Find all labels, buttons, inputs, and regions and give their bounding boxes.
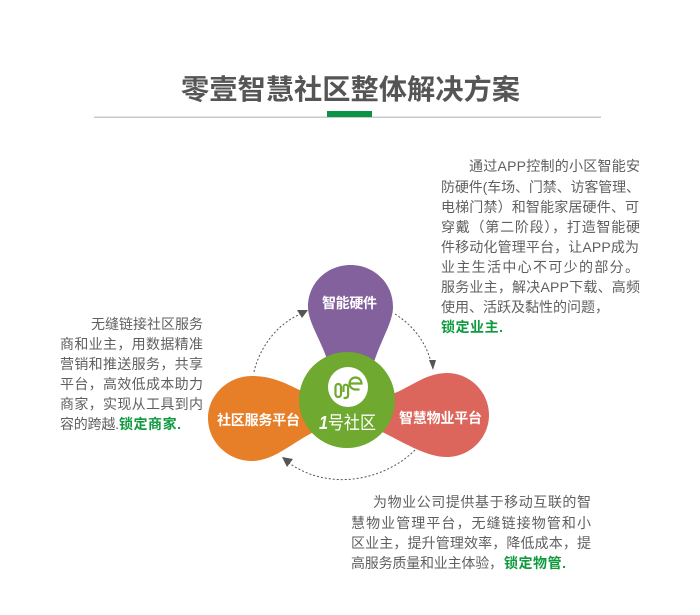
text block: smart property: 区业主，提升管理效率，降低成本，提: [351, 535, 591, 551]
text block: smart property: [351, 494, 591, 571]
text block: community services: 商和业主，用数据精准: [60, 336, 203, 352]
arrow: community services to hardware: [254, 310, 308, 372]
text block: smart property: 高服务质量和业主体验，: [351, 555, 503, 571]
center badge: 1号社区: [299, 352, 395, 448]
petal: smart hardware: [308, 265, 393, 362]
text block: smart hardware: 电梯门禁）和智能家居硬件、可: [441, 199, 639, 215]
arrow: hardware to property: [395, 314, 436, 370]
text block: community services: 平台，高效低成本助力: [60, 376, 203, 392]
badge name: 1号社区: [319, 413, 376, 433]
text block: smart property: 锁定物管.: [504, 555, 566, 571]
petal labels: 智慧物业平台: [399, 410, 482, 426]
text block: smart hardware: [441, 158, 640, 335]
text block: smart hardware: 件移动化管理平台，让APP成为: [441, 239, 639, 255]
petal labels: 智能硬件: [322, 295, 377, 311]
arrow: property to community services: [282, 450, 415, 480]
text block: smart property: 为物业公司提供基于移动互联的智: [373, 494, 591, 510]
text block: community services: 无缝链接社区服务: [91, 316, 203, 332]
text block: community services: 容的跨越.: [60, 416, 119, 432]
text block: community services: 营销和推送服务，共享: [60, 356, 203, 372]
text block: smart hardware: 穿戴（第二阶段），打造智能硬: [441, 219, 640, 235]
text block: smart hardware: 服务业主，解决APP下载、高频: [441, 279, 640, 295]
text block: smart hardware: 业主生活中心不可少的部分。: [441, 259, 639, 275]
logo: one mark: [328, 367, 368, 407]
text block: smart hardware: 通过APP控制的小区智能安: [469, 158, 640, 174]
petal: smart property: [380, 373, 489, 457]
petal labels: [217, 295, 482, 428]
text block: smart hardware: 锁定业主.: [441, 319, 503, 335]
text block: community services: 锁定商家.: [119, 416, 181, 432]
text block: community services: 商家，实现从工具到内: [60, 396, 203, 412]
title underline with green accent: [94, 111, 601, 118]
title: 零壹智慧社区整体解决方案: [181, 74, 520, 105]
text block: smart property: 慧物业管理平台，无缝链接物管和小: [351, 515, 591, 531]
text block: community services: [60, 316, 203, 432]
petal labels: 社区服务平台: [217, 412, 300, 428]
petal: community services: [208, 376, 318, 461]
text block: smart hardware: 使用、活跃及黏性的问题，: [441, 299, 609, 315]
text block: smart hardware: 防硬件(车场、门禁、访客管理、: [441, 179, 640, 195]
